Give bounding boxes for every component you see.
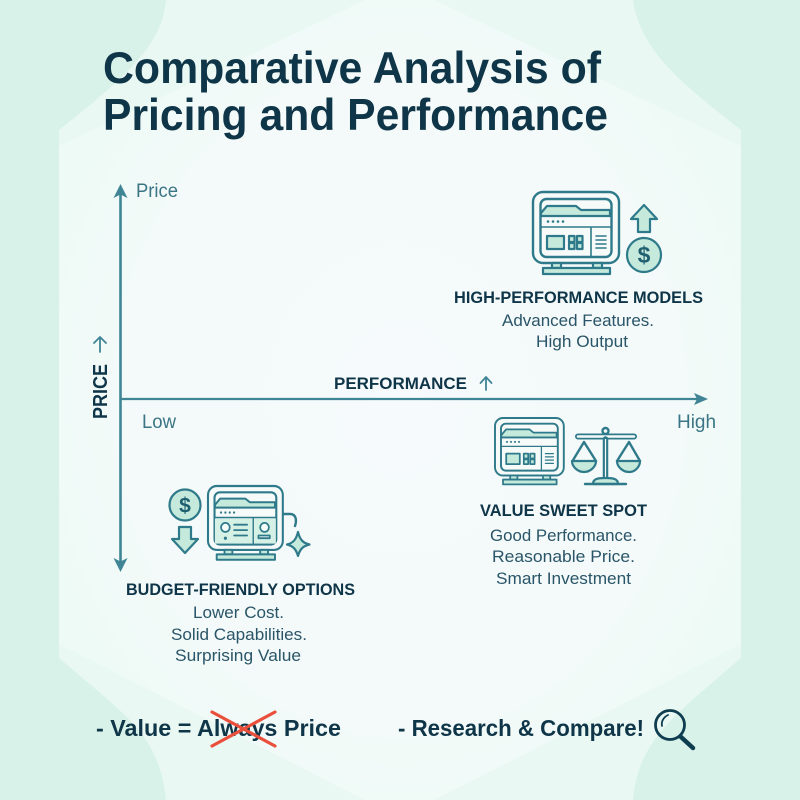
- footer note: value is not always price: - Value = Always Price: [96, 715, 341, 741]
- description: Advanced Features.: [502, 311, 654, 330]
- panel: high-performance models: [454, 192, 703, 351]
- heading: VALUE SWEET SPOT: [480, 502, 647, 520]
- icon: dollar coin: [170, 490, 200, 520]
- icon: balance scale: [572, 428, 640, 484]
- description: Lower Cost.: [193, 603, 284, 622]
- axis title: PRICE: PRICE: [90, 364, 112, 419]
- description: Solid Capabilities.: [171, 625, 307, 644]
- icon: price up arrow: [94, 337, 106, 352]
- title: Pricing and Performance: [103, 91, 608, 140]
- icon: arrow up: [631, 205, 657, 232]
- horizontal performance axis: [120, 393, 708, 405]
- panel: value sweet spot: [480, 418, 647, 588]
- description: Good Performance.: [490, 526, 637, 545]
- vertical price axis: [114, 184, 128, 572]
- description: Surprising Value: [175, 646, 301, 665]
- footer note: research and compare: [398, 710, 693, 748]
- icon: sparkle: [287, 532, 310, 556]
- title: Comparative Analysis of: [103, 44, 601, 93]
- description: Reasonable Price.: [492, 547, 635, 566]
- description: Smart Investment: [496, 569, 631, 588]
- icon: performance up arrow: [480, 377, 492, 390]
- icon: arrow down: [172, 527, 198, 553]
- description: [502, 311, 654, 351]
- title: [103, 44, 608, 140]
- icon: magnifying glass: [656, 710, 693, 748]
- footer note: research and compare: - Research & Compare!: [398, 715, 644, 741]
- icon: dollar coin: $: [638, 242, 651, 268]
- chart axes: [114, 184, 708, 572]
- icon: budget monitor: [208, 486, 296, 560]
- description: [171, 603, 307, 665]
- icon: dollar coin: [627, 238, 661, 272]
- icon: dollar coin: $: [179, 494, 191, 518]
- icon: value monitor: [495, 418, 564, 484]
- description: High Output: [536, 332, 628, 351]
- icon: red cross-out: [212, 712, 275, 746]
- description: [490, 526, 637, 588]
- heading: BUDGET-FRIENDLY OPTIONS: [126, 581, 355, 599]
- axis label: Low: Low: [142, 412, 176, 433]
- axis label: High: High: [677, 412, 716, 433]
- panel: budget-friendly options: [126, 486, 355, 665]
- icon: high-performance monitor: [533, 192, 619, 274]
- axis title: PERFORMANCE: PERFORMANCE: [334, 374, 467, 393]
- axis label: Price: Price: [136, 181, 178, 202]
- heading: HIGH-PERFORMANCE MODELS: [454, 289, 703, 307]
